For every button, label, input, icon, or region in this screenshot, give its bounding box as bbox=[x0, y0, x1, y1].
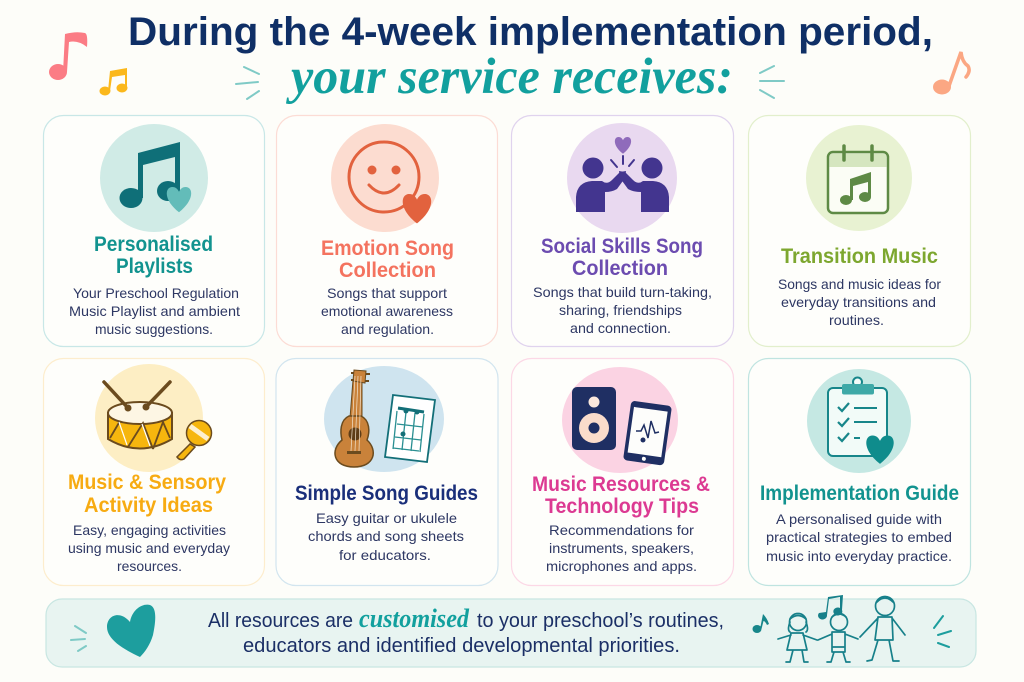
banner text bbox=[208, 604, 724, 657]
heading: Playlists bbox=[116, 255, 193, 278]
heading: Transition Music bbox=[781, 245, 938, 268]
title: your service receives: bbox=[285, 49, 733, 105]
banner text: All resources are bbox=[208, 610, 353, 632]
description: Music Playlist and ambient bbox=[69, 303, 240, 319]
icon: pink music note bbox=[49, 32, 87, 80]
description: Easy, engaging activities bbox=[73, 522, 226, 538]
heading bbox=[94, 233, 213, 278]
description: sharing, friendships bbox=[559, 302, 682, 318]
heading bbox=[541, 235, 703, 280]
panel: Social Skills Song Collection bbox=[512, 116, 734, 346]
description: routines. bbox=[829, 312, 884, 328]
description: Easy guitar or ukulele bbox=[316, 510, 457, 526]
heading: Implementation Guide bbox=[760, 482, 959, 505]
description bbox=[69, 285, 240, 337]
description: practical strategies to embed bbox=[766, 529, 952, 545]
panel: Personalised Playlists bbox=[44, 116, 264, 346]
description: for educators. bbox=[339, 547, 431, 563]
icon: title sparks left bbox=[236, 67, 259, 99]
panel: Simple Song Guides bbox=[276, 358, 498, 586]
description: everyday transitions and bbox=[781, 294, 936, 310]
description: music suggestions. bbox=[95, 321, 213, 337]
icon: speaker and tablet bbox=[562, 367, 678, 473]
icon: drum and maraca bbox=[95, 364, 212, 472]
heading bbox=[321, 237, 454, 282]
heading: Music Resources & bbox=[532, 473, 710, 496]
description: Songs that build turn-taking, bbox=[533, 284, 712, 300]
heading: Music & Sensory bbox=[68, 471, 226, 494]
description: instruments, speakers, bbox=[549, 540, 694, 556]
description: A personalised guide with bbox=[776, 511, 942, 527]
description bbox=[778, 276, 941, 328]
description bbox=[546, 522, 697, 574]
heading: Personalised bbox=[94, 233, 213, 256]
description: microphones and apps. bbox=[546, 558, 697, 574]
title bbox=[128, 10, 933, 105]
icon: smiling face with heart bbox=[331, 124, 439, 232]
panel: Music & Sensory Activity Ideas bbox=[44, 358, 264, 586]
heading bbox=[532, 473, 710, 518]
icon: calendar with music note bbox=[806, 125, 912, 231]
callout banner bbox=[46, 595, 976, 667]
icon: music note with heart bbox=[100, 124, 208, 232]
description: music into everyday practice. bbox=[766, 548, 952, 564]
heading: Collection bbox=[339, 259, 436, 282]
icon: small note bbox=[752, 614, 769, 633]
description: Recommendations for bbox=[549, 522, 694, 538]
description: Songs that support bbox=[327, 285, 447, 301]
description bbox=[533, 284, 712, 336]
description bbox=[68, 522, 230, 574]
description bbox=[308, 510, 464, 563]
panel: Emotion Song Collection bbox=[276, 116, 498, 346]
heading: Activity Ideas bbox=[84, 494, 213, 517]
icon: orange music note bbox=[933, 52, 969, 94]
title: During the 4-week implementation period, bbox=[128, 10, 933, 54]
icon: yellow double note bbox=[100, 68, 128, 96]
description bbox=[766, 511, 952, 564]
panel: Music Resources & Technology Tips bbox=[512, 358, 734, 586]
panel: Transition Music bbox=[748, 116, 970, 346]
icon: banner sparks left bbox=[71, 626, 86, 651]
heading: Collection bbox=[572, 257, 668, 280]
banner text: educators and identified developmental priorities. bbox=[243, 635, 680, 657]
icon: banner sparks right bbox=[934, 616, 951, 647]
heading: Emotion Song bbox=[321, 237, 454, 260]
description: and regulation. bbox=[341, 321, 434, 337]
banner text: to your preschool’s routines, bbox=[477, 610, 724, 632]
icon: title sparks right bbox=[760, 66, 784, 98]
icon: children holding hands bbox=[778, 595, 905, 662]
icon: clipboard checklist with heart bbox=[807, 369, 911, 473]
description: resources. bbox=[117, 558, 182, 574]
description: using music and everyday bbox=[68, 540, 230, 556]
description: and connection. bbox=[570, 320, 671, 336]
panel: Implementation Guide bbox=[748, 358, 970, 586]
heading: Social Skills Song bbox=[541, 235, 703, 258]
heading bbox=[68, 471, 226, 517]
icon: teal heart bbox=[107, 605, 155, 657]
banner text: customised bbox=[359, 604, 470, 633]
description: Your Preschool Regulation bbox=[73, 285, 239, 301]
description bbox=[321, 285, 453, 337]
heading: Technology Tips bbox=[545, 495, 699, 518]
icon: ukulele and chord sheet bbox=[324, 366, 444, 472]
description: emotional awareness bbox=[321, 303, 453, 319]
icon: two people high five bbox=[567, 123, 677, 233]
description: Songs and music ideas for bbox=[778, 276, 941, 292]
description: chords and song sheets bbox=[308, 528, 464, 544]
heading: Simple Song Guides bbox=[295, 482, 478, 505]
